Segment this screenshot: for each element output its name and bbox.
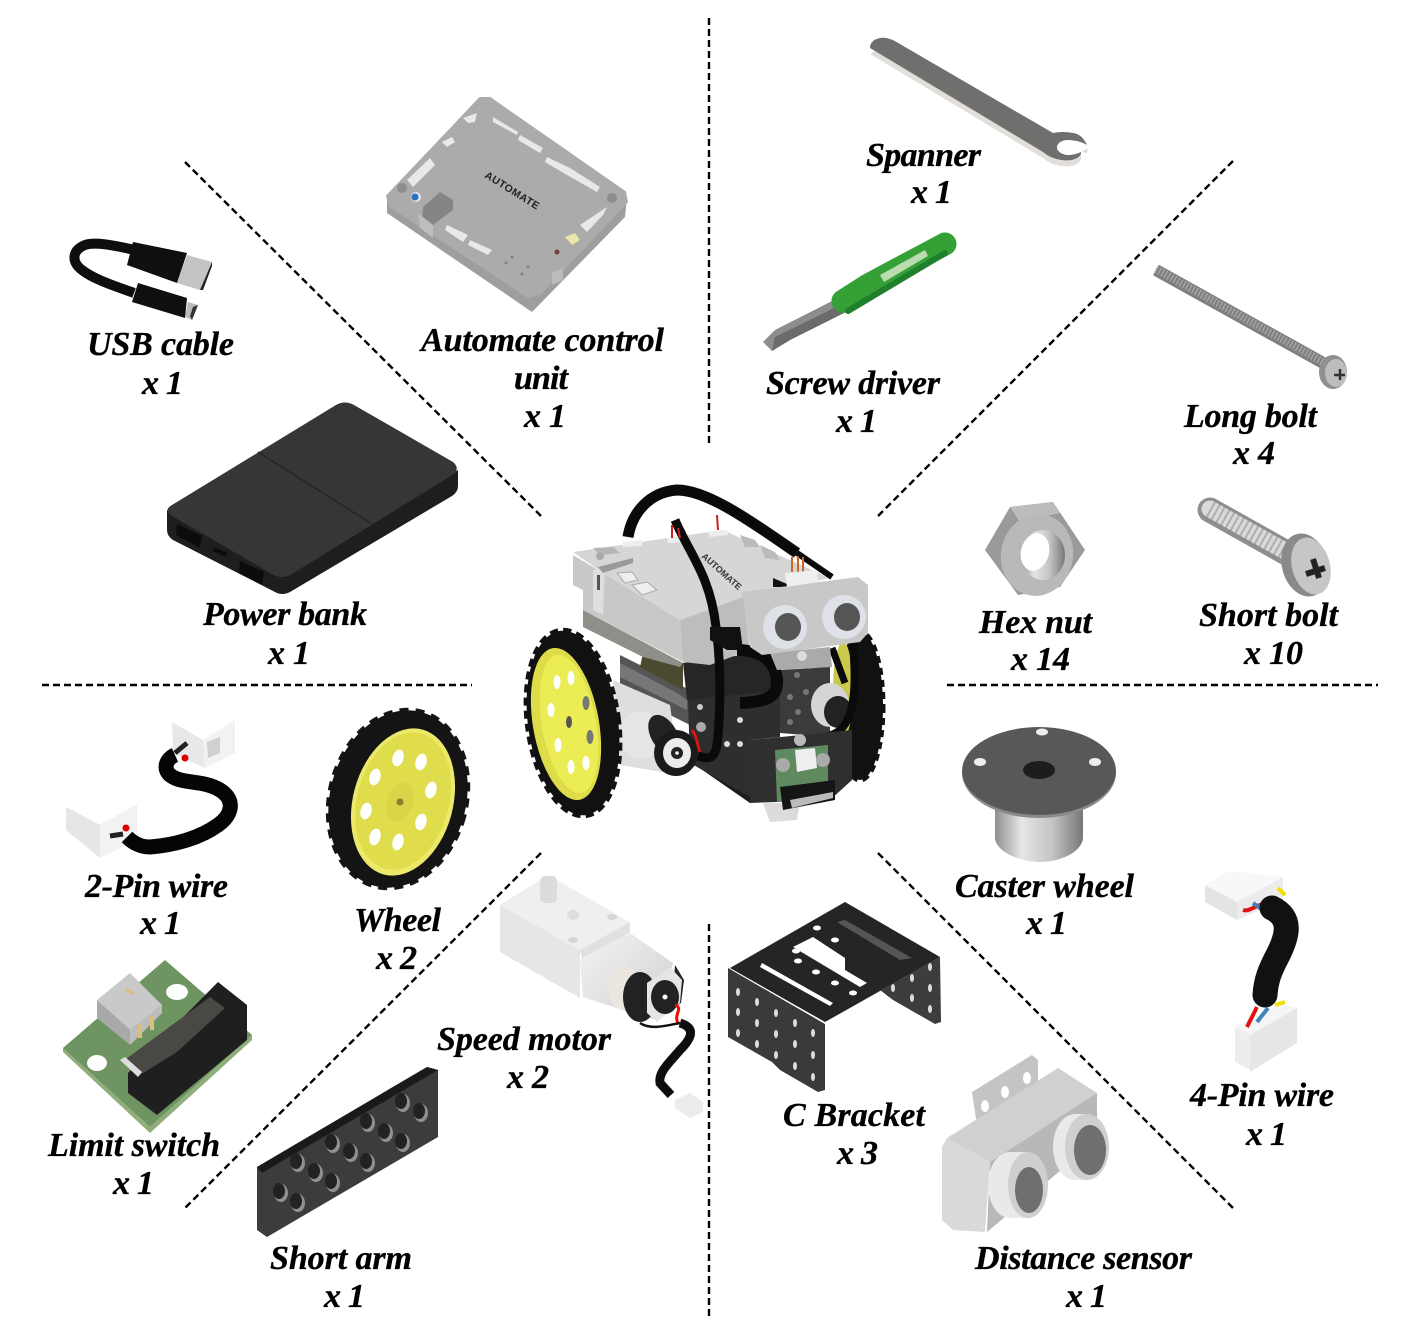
icon: control unit	[387, 98, 627, 312]
robot speed motor	[613, 680, 852, 776]
label: Long bolt x 4: Long bolt	[1183, 398, 1319, 435]
label: USB cable x 1	[87, 326, 234, 402]
icon: control unit: AUTOMATE	[482, 169, 541, 212]
label: Short bolt x 10: Short bolt	[1199, 597, 1340, 634]
label: Distance sensor x 1	[974, 1240, 1193, 1315]
icon: C bracket	[728, 902, 941, 1092]
label: 2-Pin wire x 1: x 1	[139, 905, 181, 942]
label: USB cable x 1: x 1	[141, 365, 183, 402]
label: Hex nut x 14	[978, 604, 1094, 678]
label: Short bolt x 10: x 10	[1243, 635, 1303, 672]
icon: short bolt	[1210, 509, 1337, 602]
label: Limit switch x 1: x 1	[112, 1165, 154, 1202]
robot limit switch assembly	[750, 730, 852, 810]
robot chassis	[620, 650, 830, 822]
label: Limit switch x 1	[47, 1127, 220, 1202]
label: Long bolt x 4: x 4	[1232, 435, 1275, 472]
icon: long bolt	[1156, 269, 1347, 389]
label: Wheel x 2	[354, 902, 442, 977]
icon: USB cable	[74, 242, 212, 320]
icon: caster wheel	[962, 727, 1116, 862]
icon: short arm	[257, 1067, 438, 1237]
label: Hex nut x 14: Hex nut	[978, 604, 1094, 641]
robot right wheel	[833, 632, 883, 780]
robot controller	[573, 530, 830, 667]
label: Screw driver x 1	[766, 365, 941, 440]
icon: limit switch	[63, 960, 252, 1133]
label: Short arm x 1	[270, 1240, 412, 1315]
label: Spanner x 1	[866, 137, 982, 211]
robot wire tie block	[710, 627, 743, 650]
label: Power bank x 1: x 1	[267, 635, 310, 672]
label: Automate control unit x 1: Automate control	[419, 322, 665, 359]
label: Hex nut x 14: x 14	[1010, 641, 1070, 678]
icon: power bank	[167, 402, 458, 594]
label: C Bracket x 3	[783, 1097, 927, 1172]
label: Short arm x 1: x 1	[323, 1278, 365, 1315]
icon: speed motor	[500, 875, 703, 1118]
label: Wheel x 2: x 2	[375, 940, 417, 977]
label: Caster wheel x 1	[955, 868, 1135, 942]
illustration: assembled robot	[515, 490, 883, 822]
label: Automate control unit x 1	[419, 322, 665, 435]
label: 4-Pin wire x 1: x 1	[1245, 1116, 1287, 1153]
robot distance sensor	[742, 570, 868, 670]
icon: spanner	[870, 38, 1088, 166]
label: Screw driver x 1: Screw driver	[766, 365, 941, 402]
label: Spanner x 1: x 1	[910, 174, 952, 211]
icon: hex nut	[985, 502, 1085, 602]
label: Caster wheel x 1: x 1	[1025, 905, 1067, 942]
label: C Bracket x 3: C Bracket	[783, 1097, 927, 1134]
label: Automate control unit x 1: unit	[514, 360, 570, 397]
label: Caster wheel x 1: Caster wheel	[955, 868, 1135, 905]
robot left wheel	[515, 625, 631, 821]
label: Short arm x 1: Short arm	[270, 1240, 412, 1277]
label: Automate control unit x 1: x 1	[523, 398, 566, 435]
label: 4-Pin wire x 1	[1189, 1077, 1334, 1153]
label: Speed motor x 2	[437, 1021, 612, 1096]
label: Screw driver x 1: x 1	[835, 403, 877, 440]
label: Wheel x 2: Wheel	[354, 902, 442, 939]
label: Distance sensor x 1: Distance sensor	[974, 1240, 1193, 1277]
label: Distance sensor x 1: x 1	[1065, 1278, 1107, 1315]
label: USB cable x 1: USB cable	[87, 326, 234, 363]
label: Power bank x 1: Power bank	[202, 596, 367, 633]
icon: wheel	[309, 694, 487, 904]
label: Long bolt x 4	[1183, 398, 1319, 472]
label: Speed motor x 2: x 2	[506, 1059, 549, 1096]
icon: 2-pin wire	[66, 720, 235, 858]
label: C Bracket x 3: x 3	[836, 1135, 878, 1172]
icon: 4-pin wire	[1205, 871, 1297, 1072]
icon: screw driver	[763, 244, 945, 351]
robot wires	[628, 490, 855, 758]
label: Power bank x 1	[202, 596, 367, 672]
robot controller: AUTOMATE	[700, 551, 744, 592]
label: Limit switch x 1: Limit switch	[47, 1127, 220, 1164]
icon: distance sensor	[942, 1055, 1109, 1232]
label: Spanner x 1: Spanner	[866, 137, 982, 174]
label: 2-Pin wire x 1: 2-Pin wire	[84, 868, 228, 905]
label: Short bolt x 10	[1199, 597, 1340, 672]
label: Speed motor x 2: Speed motor	[437, 1021, 612, 1058]
label: 4-Pin wire x 1: 4-Pin wire	[1189, 1077, 1334, 1114]
label: 2-Pin wire x 1	[84, 868, 228, 942]
